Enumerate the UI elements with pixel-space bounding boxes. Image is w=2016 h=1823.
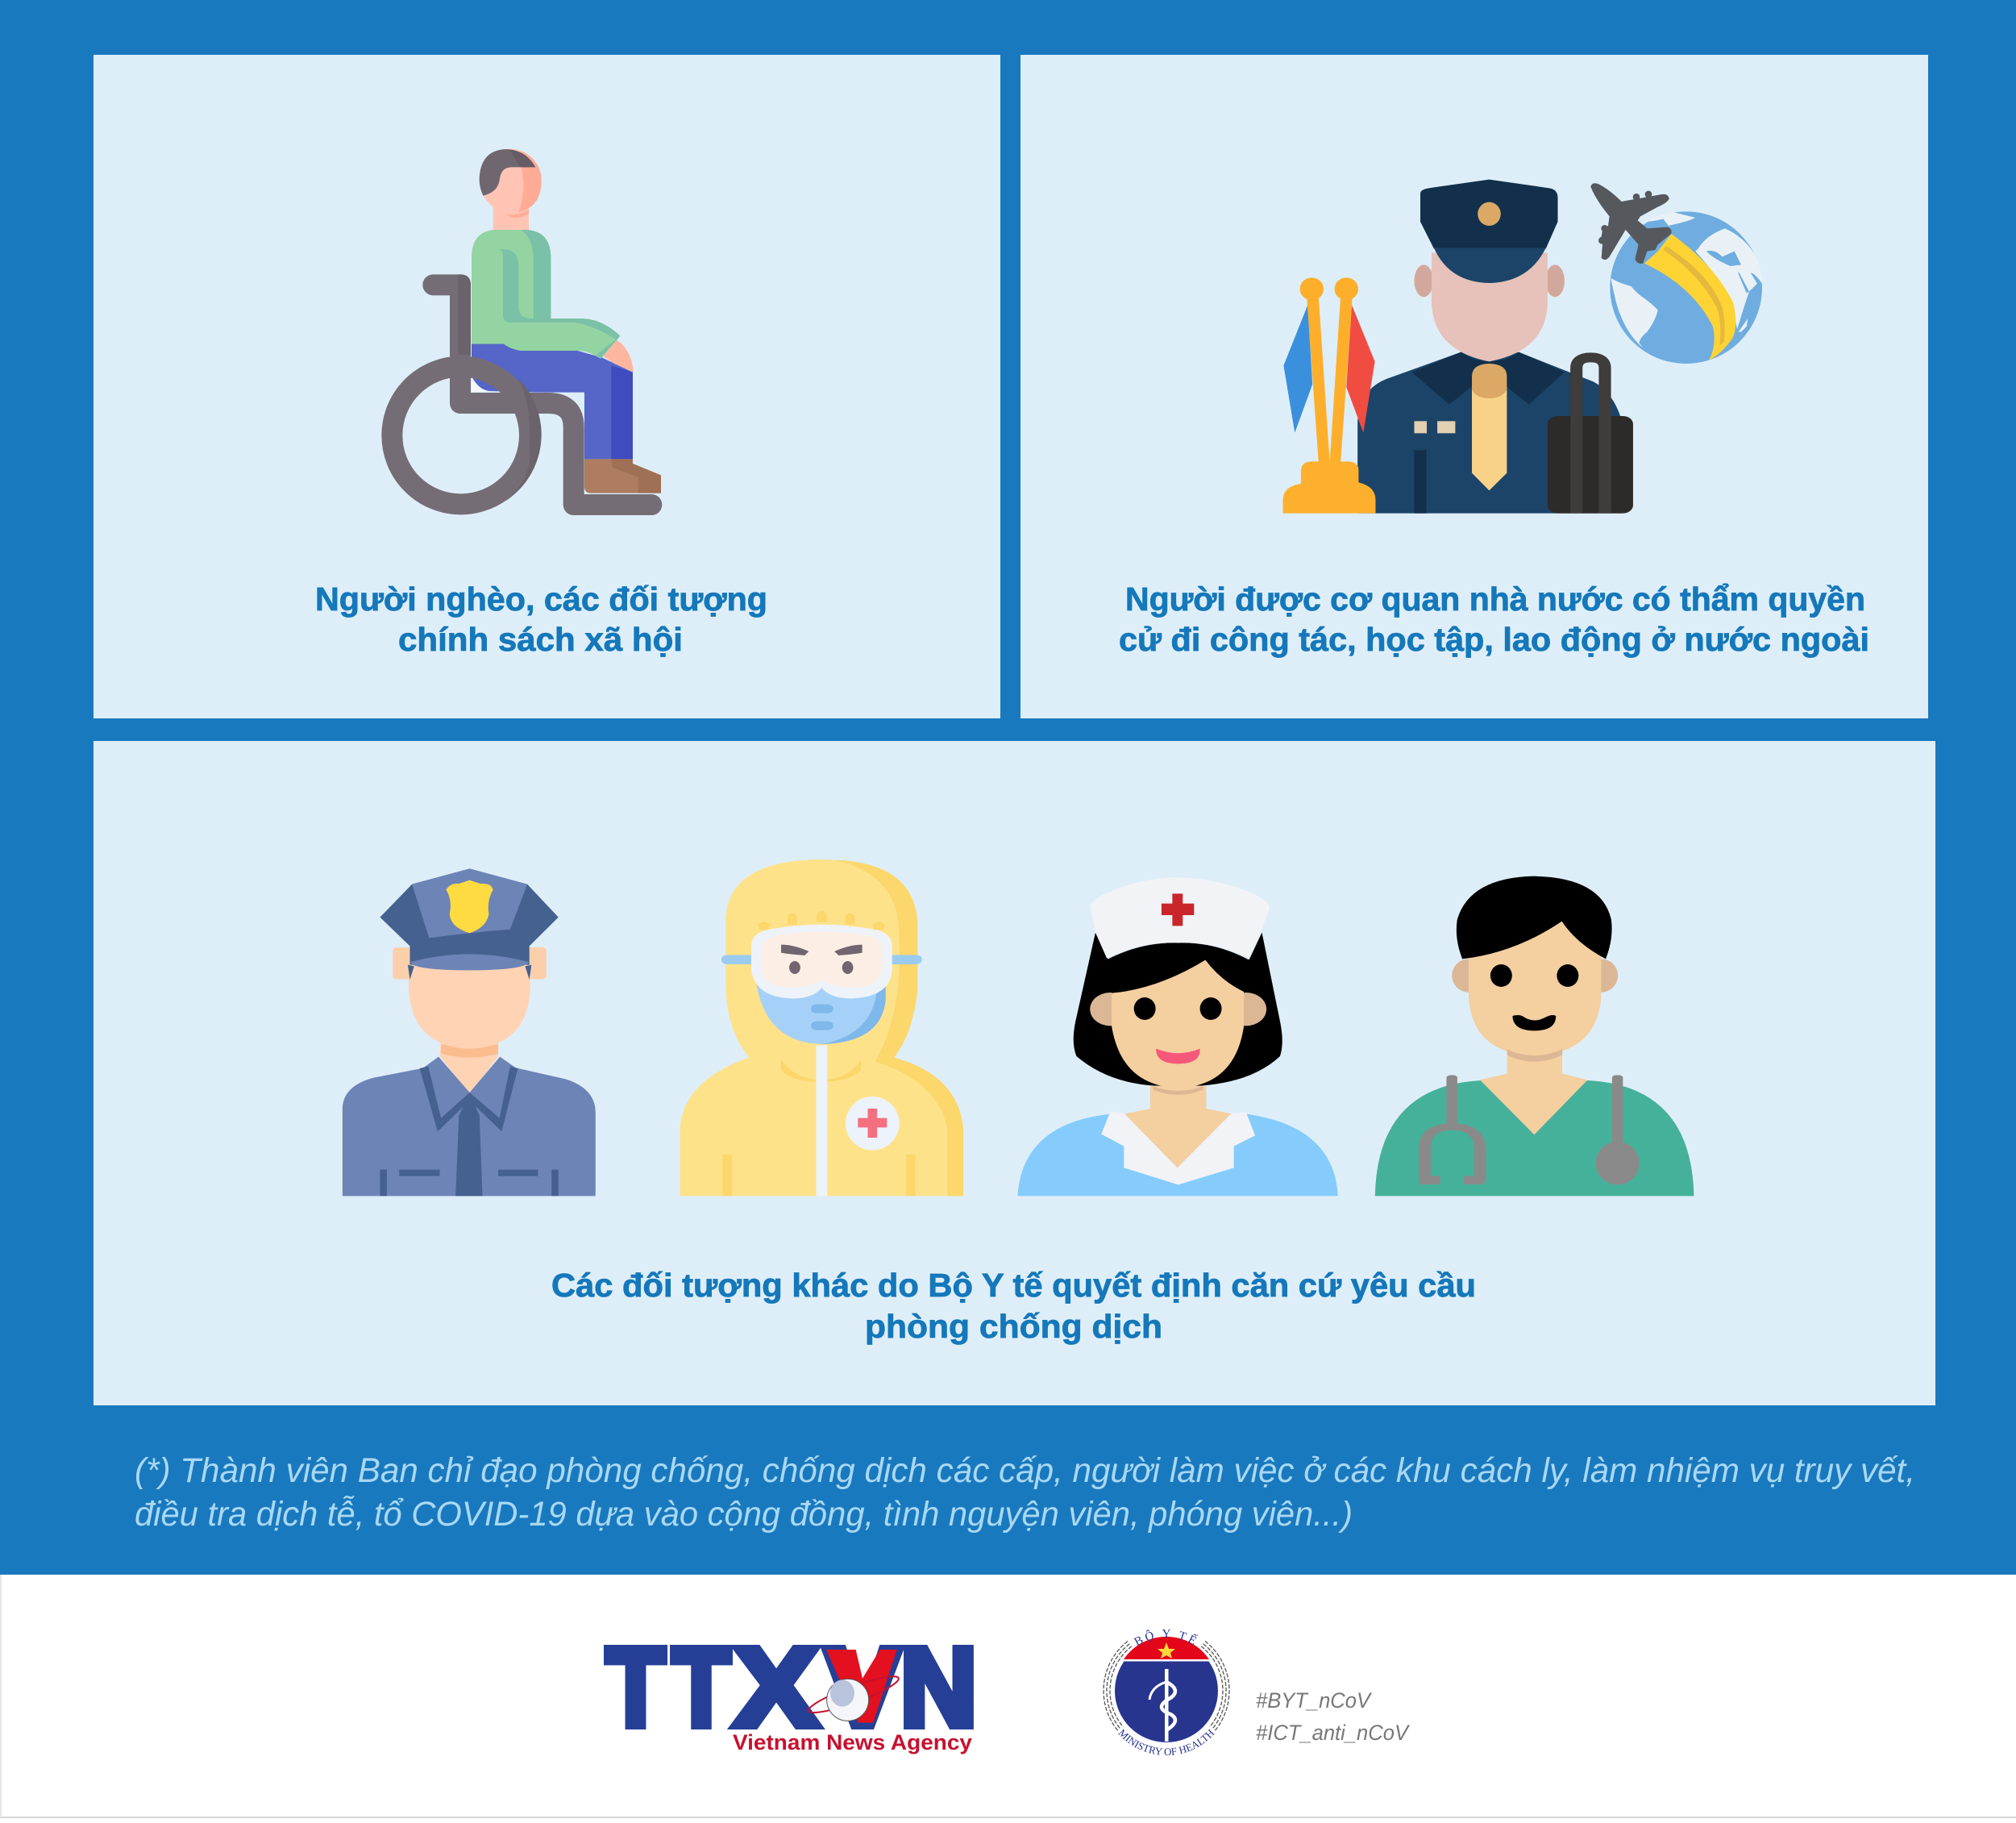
logo: TTXVN Vietnam News Agency: V	[825, 1625, 900, 1750]
logo: TTXVN Vietnam News Agency: Vietnam News Agency	[733, 1730, 972, 1754]
text: other groups label: Các đối tượng khác do Bộ Y tế quyết định căn cứ yêu cầu	[551, 1267, 1476, 1304]
hashtags: #BYT_nCoV	[1256, 1688, 1373, 1713]
icon: table flags	[1283, 277, 1375, 514]
footnote	[135, 1451, 1915, 1534]
icon: police officer	[343, 868, 596, 1196]
hashtags: #ICT_anti_nCoV	[1256, 1721, 1411, 1745]
text: people sent abroad label	[1119, 581, 1869, 658]
text: poor people label: Người nghèo, các đối tượng	[315, 581, 767, 618]
text: people sent abroad label: cử đi công tác, học tập, lao động ở nước ngoài	[1119, 621, 1869, 658]
icon: doctor with stethoscope	[1375, 876, 1694, 1196]
footnote: (*) Thành viên Ban chỉ đạo phòng chống, chống dịch các cấp, người làm việc ở các khu cách ly, làm nhiệm vụ truy vết,	[135, 1451, 1915, 1490]
logo: TTXVN Vietnam News Agency: T	[672, 1625, 730, 1750]
logo: TTXVN Vietnam News Agency: X	[734, 1625, 818, 1750]
icon: suitcase	[1548, 357, 1633, 514]
logo: TTXVN Vietnam News Agency	[606, 1625, 977, 1754]
icon: diplomat officer with flags and suitcase	[1283, 180, 1633, 514]
text: poor people label: chính sách xã hội	[398, 621, 683, 658]
icon: man in wheelchair	[392, 149, 661, 505]
panel: poor and social policy people	[94, 55, 1000, 718]
logo: TTXVN Vietnam News Agency: N	[900, 1625, 977, 1750]
icon: nurse	[1017, 877, 1338, 1196]
text: poor people label	[315, 581, 767, 658]
logo: TTXVN Vietnam News Agency: T	[606, 1625, 665, 1750]
logo: Ministry of Health emblem: MINISTRY OF HEALTH	[1118, 1729, 1215, 1756]
icon: person in protective suit	[680, 859, 963, 1196]
panel: people sent abroad	[1020, 55, 1928, 718]
text: other groups label: phòng chống dịch	[865, 1308, 1162, 1345]
footnote: điều tra dịch tễ, tổ COVID-19 dựa vào cộng đồng, tình nguyện viên, phóng viên...)	[135, 1495, 1353, 1534]
text: other groups label	[551, 1267, 1476, 1345]
panel: other groups decided by the Ministry of Health	[94, 741, 1935, 1405]
logo: Ministry of Health emblem	[1103, 1629, 1230, 1756]
icon: globe and plane	[1590, 183, 1762, 364]
logo: Ministry of Health emblem: BỘ Y TẾ	[1133, 1629, 1198, 1646]
text: people sent abroad label: Người được cơ quan nhà nước có thẩm quyền	[1125, 581, 1865, 618]
hashtags	[1256, 1688, 1411, 1745]
